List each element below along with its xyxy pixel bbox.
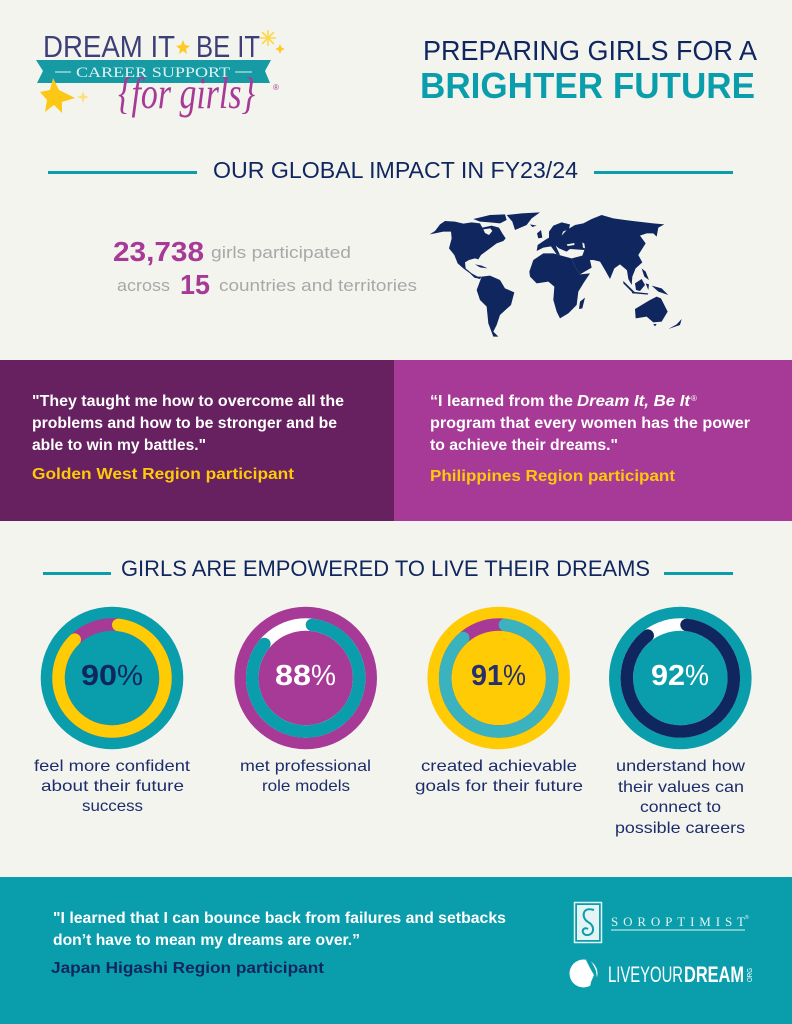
- heading: global impact: OUR GLOBAL IMPACT IN FY23/24: [213, 157, 578, 183]
- logo: Dream It Be It: DREAM IT: [43, 29, 175, 64]
- heading: global impact: [48, 157, 733, 183]
- logo: Live Your Dream: LIVEYOUR: [608, 962, 683, 987]
- stat: 92 percent: 92: [651, 660, 685, 692]
- logo: Live Your Dream: DREAM: [684, 962, 744, 987]
- stats: girls and countries: across: [117, 276, 170, 295]
- stat: 91 percent: %: [503, 660, 526, 692]
- panel: Philippines quote: [394, 360, 792, 521]
- logo: Soroptimist: [574, 902, 749, 942]
- panel: Philippines quote: Philippines Region participant: [430, 468, 675, 485]
- logo: Dream It Be It: [36, 29, 285, 118]
- stat: 92 percent: connect to: [640, 799, 721, 816]
- stat: 92 percent: their values can: [618, 779, 744, 796]
- stat: 88 percent: met professional: [240, 758, 371, 775]
- panel: Golden West quote: [0, 360, 394, 521]
- world map: [430, 212, 682, 337]
- logo: Dream It Be It: BE IT: [196, 29, 260, 64]
- title: BRIGHTER FUTURE: [420, 65, 755, 106]
- stat: 88 percent: role models: [262, 778, 350, 795]
- panel: footer quote: "I learned that I can bounce back from failures and setbacks: [53, 910, 506, 927]
- stat: 88 percent: [234, 607, 377, 795]
- stat: 92 percent: %: [685, 660, 709, 692]
- stat: 92 percent: possible careers: [615, 820, 745, 837]
- stat: 91 percent: 91: [471, 660, 503, 692]
- panel: Golden West quote: "They taught me how to overcome all the: [32, 393, 344, 410]
- panel: Philippines quote: program that every women has the power: [430, 415, 750, 432]
- panel: Golden West quote: Golden West Region participant: [32, 466, 294, 483]
- panel: Philippines quote: “I learned from the: [430, 393, 573, 410]
- logo: Live Your Dream: [570, 960, 754, 988]
- panel: footer quote: Japan Higashi Region participant: [51, 960, 324, 977]
- panel: Philippines quote: to achieve their dreams.": [430, 437, 618, 454]
- panel: footer quote: [0, 877, 792, 1024]
- logo: Soroptimist: SOROPTIMIST: [611, 914, 745, 929]
- stat: 88 percent: %: [311, 660, 336, 692]
- stat: 90 percent: success: [82, 798, 143, 815]
- logo: Dream It Be It: ®: [273, 83, 279, 92]
- stats: girls and countries: girls participated: [211, 243, 351, 262]
- panel: Golden West quote: able to win my battles.": [32, 437, 206, 454]
- title: [420, 35, 757, 106]
- logo: Live Your Dream: ORG: [747, 968, 754, 982]
- stat: 90 percent: feel more confident: [34, 758, 191, 775]
- stat: 91 percent: created achievable: [421, 758, 577, 775]
- stat: 92 percent: [609, 607, 752, 837]
- stat: 92 percent: understand how: [616, 758, 746, 775]
- title: PREPARING GIRLS FOR A: [423, 35, 757, 66]
- stats: girls and countries: 23,738: [113, 236, 204, 267]
- panel: Golden West quote: problems and how to be stronger and be: [32, 415, 337, 432]
- stat: 90 percent: about their future: [41, 778, 184, 795]
- stat: 90 percent: 90: [81, 660, 117, 692]
- logo: Dream It Be It: CAREER SUPPORT: [76, 65, 230, 81]
- stat: 90 percent: [34, 607, 191, 815]
- stat: 91 percent: [415, 607, 583, 795]
- heading: girls are empowered: GIRLS ARE EMPOWERED TO LIVE THEIR DREAMS: [121, 556, 650, 581]
- panel: Philippines quote: ®: [691, 394, 697, 403]
- logo: Dream It Be It: {for girls}: [118, 69, 255, 118]
- stat: 90 percent: %: [117, 660, 143, 692]
- panel: Philippines quote: Dream It, Be It: [577, 393, 691, 410]
- stat: 91 percent: goals for their future: [415, 778, 583, 795]
- stats: girls and countries: [113, 236, 417, 300]
- stats: girls and countries: 15: [180, 269, 210, 300]
- panel: footer quote: don’t have to mean my dreams are over.”: [53, 932, 360, 949]
- stat: 88 percent: 88: [275, 660, 311, 692]
- stats: girls and countries: countries and territories: [219, 276, 417, 295]
- logo: Soroptimist: ®: [745, 914, 749, 921]
